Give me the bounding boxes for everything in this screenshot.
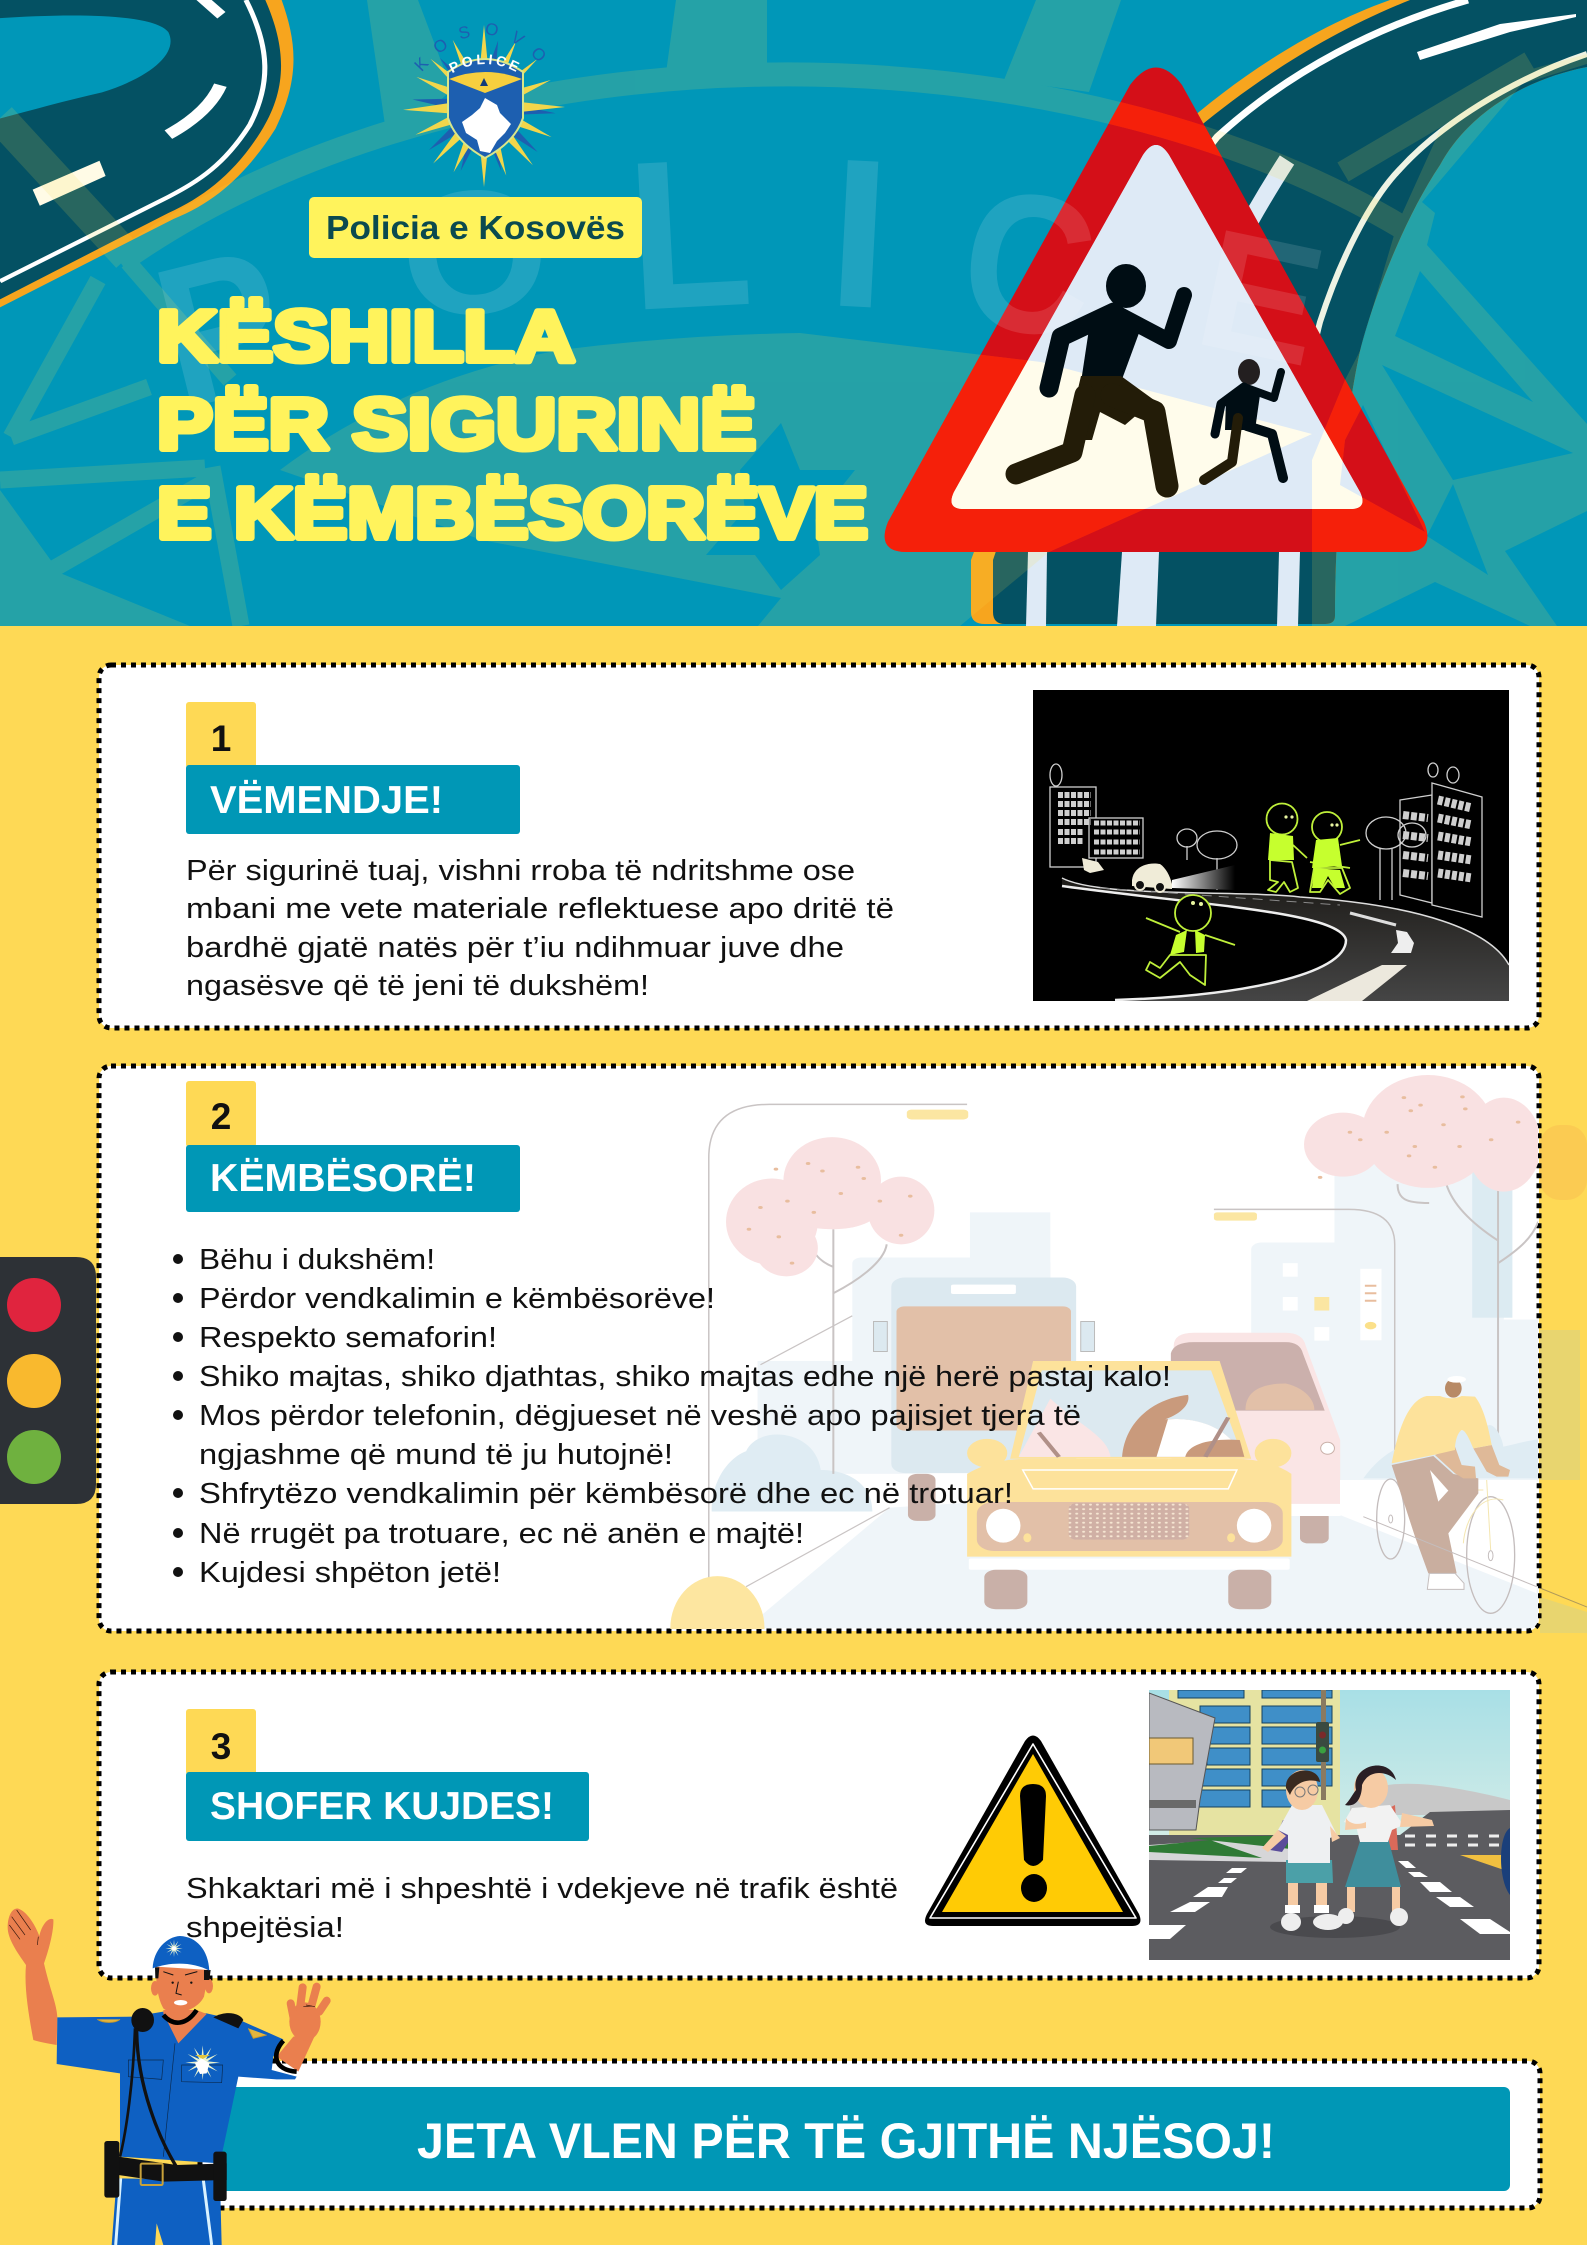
- front yellow car: [967, 1361, 1291, 1609]
- legs: [112, 2178, 222, 2245]
- text block: [186, 855, 894, 1002]
- head: [151, 1967, 213, 2012]
- text block: ngasësve që të jeni të dukshëm!: [186, 970, 649, 1002]
- traffic police officer: [8, 1909, 327, 2245]
- number badge 1: [186, 702, 256, 768]
- bullet list: ngjashme që mund të ju hutojnë!: [199, 1439, 673, 1471]
- bullet list: Shiko majtas, shiko djathtas, shiko majtas edhe një herë pastaj kalo!: [199, 1361, 1171, 1393]
- belt: [104, 2141, 227, 2201]
- title: E KËMBËSORËVE: [157, 474, 868, 554]
- title: [157, 297, 868, 554]
- road: top left curve: [0, 0, 293, 307]
- icon: small running child: [1204, 359, 1283, 480]
- bullet list: Në rrugët pa trotuare, ec në anën e majtë!: [199, 1518, 804, 1550]
- epaulettes and radio: [213, 2013, 243, 2028]
- title: KËSHILLA: [157, 297, 575, 377]
- number badge 3: 3: [211, 1726, 231, 1767]
- right arm: [277, 1987, 327, 2072]
- number badge 2: 2: [211, 1096, 231, 1137]
- heading band: SHOFER KUJDES!: SHOFER KUJDES!: [210, 1785, 554, 1828]
- bush yellow: [670, 1576, 764, 1629]
- header banner: [0, 0, 1587, 626]
- slogan bar: [215, 2087, 1510, 2191]
- bullet list: Shfrytëzo vendkalimin për këmbësorë dhe ec në trotuar!: [199, 1478, 1013, 1510]
- heading band: KËMBËSORË!: KËMBËSORË!: [210, 1157, 476, 1200]
- illustration overflow on yellow: [1540, 1125, 1587, 1633]
- logo: Kosovo Police: [403, 23, 565, 187]
- warning sign base: [885, 68, 1427, 552]
- bushes: [712, 1435, 872, 1511]
- text block: Shkaktari më i shpeshtë i vdekjeve në trafik është: [186, 1873, 898, 1905]
- logo: Kosovo Police: POLICE: [448, 54, 520, 73]
- bullet list: Bëhu i dukshëm!: [199, 1244, 435, 1276]
- badge: Policia e Kosovës: Policia e Kosovës: [326, 209, 625, 246]
- neck: [163, 2010, 207, 2043]
- heading band: VËMENDJE!: VËMENDJE!: [210, 779, 443, 822]
- panel 4: closing message: [200, 2061, 1540, 2208]
- road: top right curve: [971, 0, 1587, 626]
- bullet list: Respekto semaforin!: [199, 1322, 497, 1354]
- number badge 1: 1: [211, 718, 231, 759]
- panel 1: Vëmendje: [99, 665, 1539, 1028]
- cyclist: [1340, 1376, 1557, 1613]
- text block: shpejtësia!: [186, 1912, 344, 1944]
- watermark letters POLICE: L: [622, 112, 757, 355]
- tree left: [810, 1229, 887, 1474]
- text block: mbani me vete materiale reflektuese apo dritë të: [186, 893, 894, 925]
- chest badge: [185, 2045, 220, 2080]
- image: children on crosswalk: [1149, 1690, 1510, 1960]
- road: [1062, 878, 1509, 1001]
- heading band: SHOFER KUJDES!: [186, 1772, 589, 1841]
- street lamps: [709, 1104, 967, 1587]
- number badge 3: [186, 1709, 256, 1775]
- pavement and road: [1149, 1810, 1510, 1960]
- traffic light: [1321, 1690, 1326, 1800]
- panel 3: Shofer kujdes: [99, 1672, 1539, 1978]
- buildings: [1050, 763, 1482, 917]
- buildings: [758, 1162, 1544, 1481]
- text block: [186, 1873, 898, 1944]
- bullet list: Mos përdor telefonin, dëgjueset në veshë apo pajisjet tjera të: [199, 1400, 1081, 1432]
- title: PËR SIGURINË: [157, 385, 756, 465]
- image: night road with reflective pedestrians: [1033, 690, 1509, 1001]
- panel 2: Këmbësorë: [99, 1066, 1587, 1680]
- watermark letters POLICE: E: [1182, 193, 1339, 403]
- trees: [1197, 831, 1237, 859]
- heading band: VËMENDJE!: [186, 765, 520, 834]
- text block: Për sigurinë tuaj, vishni rroba të ndritshme ose: [186, 855, 855, 887]
- bullet list: [173, 1244, 1171, 1589]
- slogan bar: JETA VLEN PËR TË GJITHË NJËSOJ!: [417, 2113, 1275, 2169]
- number badge 2: [186, 1081, 256, 1147]
- tree right: [1396, 1184, 1538, 1434]
- bullet list: Kujdesi shpëton jetë!: [199, 1557, 501, 1589]
- traffic light: [0, 1257, 96, 1504]
- logo: Kosovo Police: KOSOVO: [414, 23, 545, 72]
- watermark letters POLICE: P: [136, 205, 307, 452]
- grey building: [1149, 1693, 1215, 1830]
- straps: [120, 2028, 135, 2157]
- watermark letters POLICE: [136, 112, 1339, 452]
- bus: [874, 1277, 1095, 1521]
- cap: [153, 1936, 209, 1971]
- star pattern overlay: [0, 0, 1587, 626]
- bullet list: Përdor vendkalimin e këmbësorëve!: [199, 1283, 715, 1315]
- icon: big running pedestrian: [1016, 264, 1184, 486]
- back car: [1171, 1333, 1341, 1543]
- heading band: KËMBËSORË!: [186, 1145, 520, 1212]
- badge: Policia e Kosovës: [309, 197, 642, 258]
- illustration: city street with cars: [670, 1075, 1538, 1629]
- watermark letters POLICE: O: [394, 149, 556, 355]
- crosswalk stripes: [1149, 1861, 1510, 1939]
- boy: [1262, 1770, 1343, 1931]
- girl: [1338, 1766, 1434, 1926]
- shadows: [1270, 1916, 1400, 1938]
- shirt: [57, 2012, 297, 2163]
- icon: warning triangle: [925, 1736, 1140, 1926]
- watermark letters POLICE: I: [824, 113, 895, 353]
- reflective figures: [1146, 804, 1360, 985]
- car and beam: [1172, 865, 1235, 890]
- text block: bardhë gjatë natës për t’iu ndihmuar juve dhe: [186, 932, 844, 964]
- road: [763, 1503, 1538, 1628]
- watermark letters POLICE: C: [949, 146, 1109, 382]
- raised left arm: [8, 1909, 57, 2045]
